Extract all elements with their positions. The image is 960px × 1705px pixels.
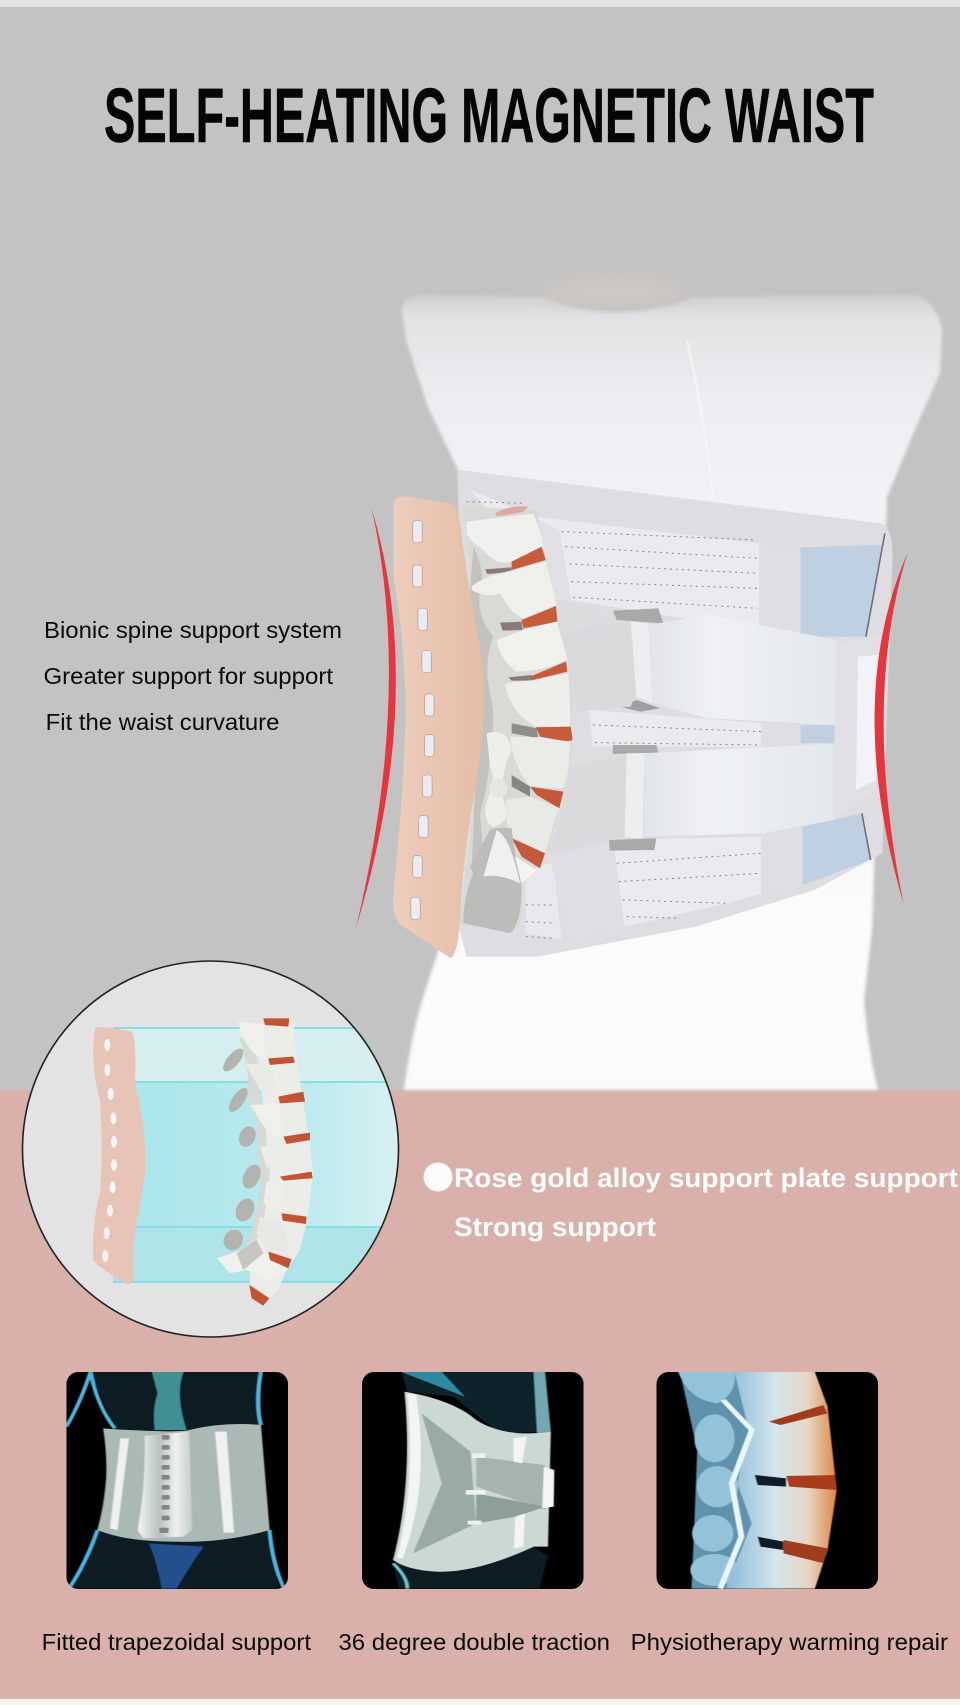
callout: rose gold plate: Rose gold alloy support plate support <box>454 1163 958 1193</box>
left feature text: Fit the waist curvature <box>46 709 279 735</box>
grey background <box>0 0 960 1090</box>
top strip <box>0 0 960 7</box>
small spine <box>217 1018 313 1306</box>
thumbnail: physiotherapy warming repair <box>656 1372 878 1589</box>
upper strap <box>557 600 836 725</box>
cyan projection bands <box>113 1027 413 1283</box>
captions: Fitted trapezoidal support <box>42 1629 312 1655</box>
left feature text: Bionic spine support system <box>44 617 342 643</box>
red curve right <box>875 553 907 903</box>
captions <box>42 1629 948 1655</box>
bottom strip <box>0 1699 960 1705</box>
callout: rose gold plate: Strong support <box>454 1212 656 1242</box>
captions: 36 degree double traction <box>338 1629 610 1655</box>
thumbnail: 36 degree double traction <box>362 1372 584 1589</box>
pink lower panel <box>0 1090 960 1699</box>
waist belt with spine and support plate <box>356 470 907 958</box>
red curve left <box>356 508 396 928</box>
belt base <box>459 470 892 957</box>
rose gold support plate <box>393 496 484 958</box>
mannequin torso <box>402 276 942 1090</box>
velcro end pad <box>834 637 880 820</box>
callout: rose gold plate <box>454 1163 958 1242</box>
thumbnail: fitted trapezoidal support <box>66 1372 288 1589</box>
lower strap <box>550 743 834 855</box>
spine overlay <box>460 506 573 933</box>
left feature text <box>44 617 342 735</box>
captions: Physiotherapy warming repair <box>631 1629 948 1655</box>
circle inset: plate and spine <box>22 961 413 1337</box>
white bullet <box>424 1162 452 1192</box>
small plate <box>93 1027 145 1285</box>
left feature text: Greater support for support <box>44 663 334 689</box>
